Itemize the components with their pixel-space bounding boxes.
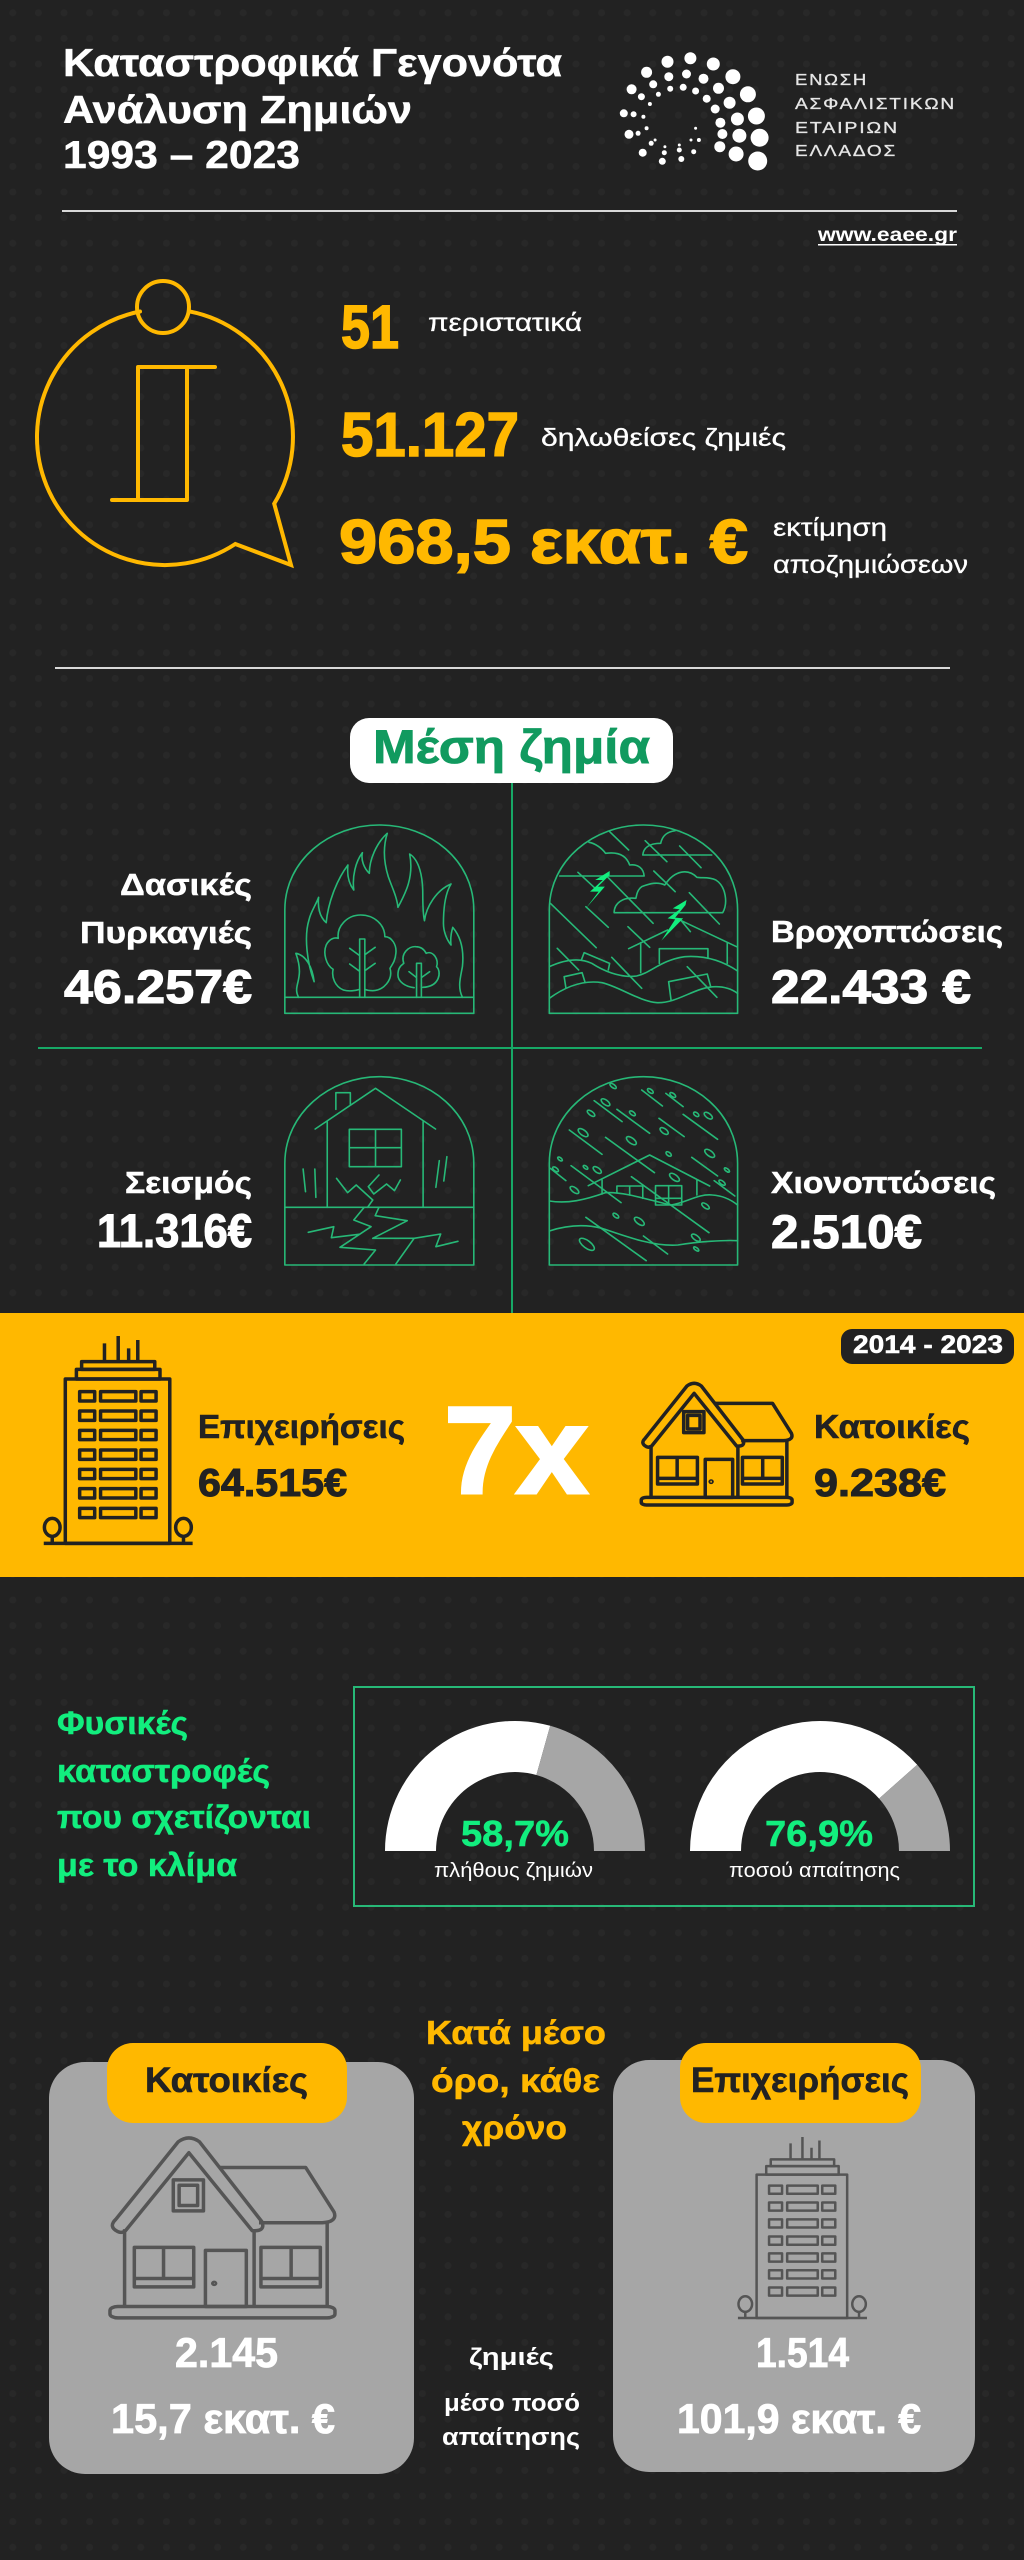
badge: 2014 - 2023 (841, 1329, 1014, 1364)
title: 1993 – 2023 (63, 134, 300, 177)
homes value (814, 1408, 970, 1505)
panel: snowfall label: 2.510€ (771, 1205, 922, 1258)
stat: estimated compensation: αποζημιώσεων (773, 551, 968, 579)
panel: rainfall label: 22.433 € (771, 960, 971, 1013)
icon: house (641, 1383, 792, 1505)
stat: declared claims: 51.127 (341, 401, 519, 470)
logo wordmark (795, 72, 956, 160)
panel: forest fires label: Δασικές (120, 867, 252, 902)
stat: estimated compensation (339, 508, 968, 579)
panel: homes average (49, 2043, 414, 2474)
badge: 2014 - 2023: 2014 - 2023 (853, 1331, 1003, 1359)
panel: rainfall label: Βροχοπτώσεις (771, 914, 1003, 949)
multiplier 7x: 7x (444, 1382, 588, 1520)
stat: incidents: περιστατικά (428, 309, 582, 337)
stat: incidents: 51 (341, 293, 399, 361)
stat: declared claims: δηλωθείσες ζημιές (541, 424, 786, 452)
homes value: Κατοικίες (814, 1408, 970, 1445)
gauge: claim amount: ποσού απαίτησης (729, 1860, 900, 1882)
logo: dot spiral emblem (620, 52, 769, 170)
stat: declared claims (341, 401, 786, 470)
row labels: ζημιές (469, 2344, 554, 2371)
icon: house grey (110, 2138, 335, 2318)
climate related heading: με το κλίμα (57, 1847, 237, 1883)
panel: earthquake label (97, 1165, 252, 1257)
businesses value: Επιχειρήσεις (198, 1408, 405, 1445)
logo wordmark: ΑΣΦΑΛΙΣΤΙΚΩΝ (795, 96, 956, 113)
panel: forest fires label: 46.257€ (64, 960, 252, 1013)
businesses tag: Επιχειρήσεις (691, 2061, 909, 2100)
average per year heading: χρόνο (462, 2109, 567, 2146)
average per year heading (426, 2014, 606, 2146)
title (63, 42, 562, 177)
icon: storm and flood (549, 825, 738, 1013)
logo wordmark: ΕΝΩΣΗ (795, 72, 868, 89)
climate related heading: που σχετίζονται (57, 1799, 311, 1835)
stat: estimated compensation: εκτίμηση (773, 514, 887, 542)
homes figures: 15,7 εκατ. € (111, 2395, 335, 2442)
panel: earthquake label: Σεισμός (125, 1165, 252, 1200)
stat: incidents (341, 293, 582, 361)
icon: information speech bubble (37, 281, 293, 565)
homes tag (107, 2043, 347, 2123)
website link: www.eaee.gr (817, 225, 958, 246)
homes tag: Κατοικίες (145, 2061, 308, 2100)
panel: rainfall label (771, 914, 1003, 1013)
logo wordmark: ΕΤΑΙΡΙΩΝ (795, 120, 899, 137)
businesses tag (680, 2043, 921, 2123)
gauge: claim amount (690, 1721, 950, 1882)
average per year heading: όρο, κάθε (431, 2062, 600, 2099)
icon: forest fire (285, 825, 474, 1013)
icon: earthquake (285, 1077, 474, 1265)
climate related heading: καταστροφές (57, 1753, 270, 1789)
average per year heading: Κατά μέσο (426, 2014, 606, 2051)
panel: snowfall label: Χιονοπτώσεις (771, 1165, 996, 1200)
row labels (442, 2344, 580, 2451)
gauge: number of claims (385, 1721, 645, 1882)
stat: estimated compensation: 968,5 εκατ. € (339, 508, 748, 577)
homes figures: 2.145 (175, 2329, 278, 2376)
title: Καταστροφικά Γεγονότα (63, 42, 562, 85)
row labels: απαίτησης (442, 2424, 580, 2451)
row labels: μέσο ποσό (444, 2390, 580, 2417)
gauge: claim amount: 76,9% (765, 1813, 873, 1854)
gauge: number of claims: πλήθους ζημιών (434, 1860, 593, 1882)
icon: office building (44, 1336, 193, 1543)
panel: forest fires label (64, 867, 252, 1013)
panel: climate gauges (354, 1687, 974, 1906)
homes value: 9.238€ (814, 1462, 946, 1505)
climate related heading: Φυσικές (57, 1705, 188, 1741)
title: Ανάλυση Ζημιών (63, 89, 412, 132)
panel: businesses average (613, 2043, 975, 2472)
panel: businesses versus homes band (0, 1313, 1024, 1577)
businesses value: 64.515€ (198, 1462, 347, 1505)
icon: building grey (738, 2137, 867, 2318)
gauge: number of claims: 58,7% (461, 1813, 569, 1854)
panel: snowfall label (771, 1165, 996, 1258)
businesses figures (677, 2329, 921, 2442)
icon: snowfall (549, 1077, 738, 1265)
logo wordmark: ΕΛΛΑΔΟΣ (795, 143, 897, 160)
businesses figures: 1.514 (756, 2329, 850, 2376)
heading: average damage: Μέση ζημία (373, 720, 650, 773)
panel: forest fires label: Πυρκαγιές (80, 915, 252, 950)
climate related heading (57, 1705, 311, 1883)
panel: earthquake label: 11.316€ (97, 1204, 252, 1257)
businesses value (198, 1408, 405, 1505)
businesses figures: 101,9 εκατ. € (677, 2395, 921, 2442)
heading: average damage (350, 718, 673, 783)
homes figures (111, 2329, 335, 2442)
